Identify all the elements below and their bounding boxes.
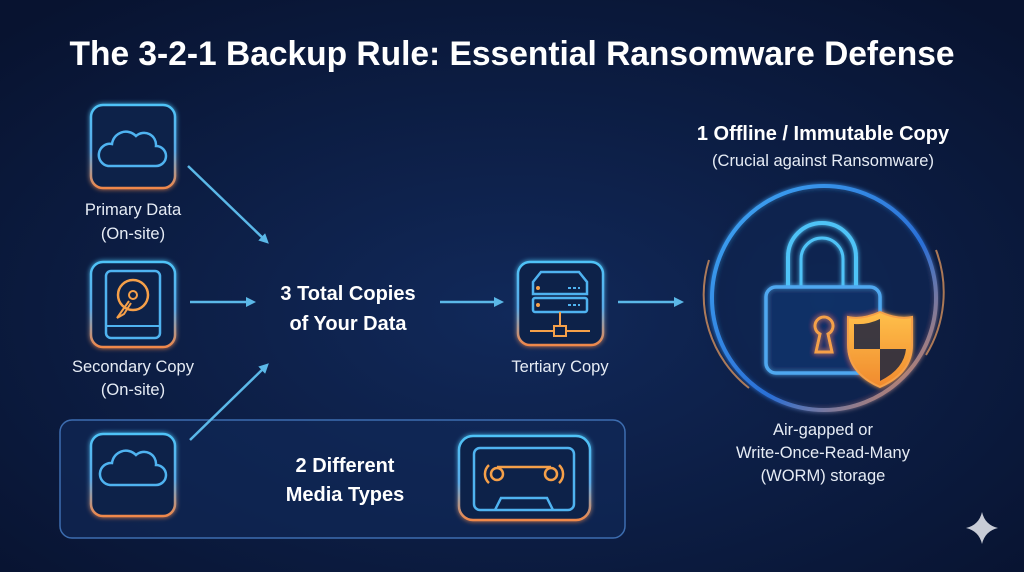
text: (On-site) bbox=[101, 381, 165, 399]
icon: tertiary server bbox=[518, 262, 603, 345]
heading: offline copy: 1 Offline / Immutable Copy bbox=[697, 123, 950, 145]
text: air-gapped storage: Air-gapped or bbox=[773, 421, 873, 439]
icon: primary data cloud bbox=[91, 105, 175, 188]
arrow: primary to total bbox=[188, 166, 266, 241]
arrow: media cloud to total bbox=[190, 366, 266, 440]
panel: 2 different media types bbox=[60, 420, 625, 538]
text: Write-Once-Read-Many bbox=[736, 444, 911, 462]
title: The 3-2-1 Backup Rule: Essential Ransomware Defense bbox=[70, 35, 954, 73]
text: 3 total copies: 3 Total Copies bbox=[280, 283, 416, 305]
text: 2 different media types: 2 Different bbox=[296, 455, 395, 477]
text: (Crucial against Ransomware) bbox=[712, 152, 934, 170]
icon: secondary copy hard drive bbox=[91, 262, 175, 347]
arrow: secondary to total bbox=[190, 301, 252, 303]
icon: tape cassette bbox=[459, 436, 590, 520]
text: (On-site) bbox=[101, 225, 165, 243]
icon: sparkle bbox=[966, 512, 998, 544]
panel: 2 different media types: Media Types bbox=[286, 484, 404, 506]
label: primary data: Primary Data bbox=[85, 201, 182, 219]
arrow: tertiary to offline bbox=[618, 301, 680, 303]
arrow: total to tertiary bbox=[440, 301, 500, 303]
label: tertiary copy: Tertiary Copy bbox=[511, 358, 609, 376]
label: secondary copy: Secondary Copy bbox=[72, 358, 195, 376]
icon: cloud (media panel) bbox=[91, 434, 175, 516]
text: (WORM) storage bbox=[761, 467, 885, 485]
text: of Your Data bbox=[289, 313, 407, 335]
icon: lock with shield bbox=[693, 170, 953, 430]
